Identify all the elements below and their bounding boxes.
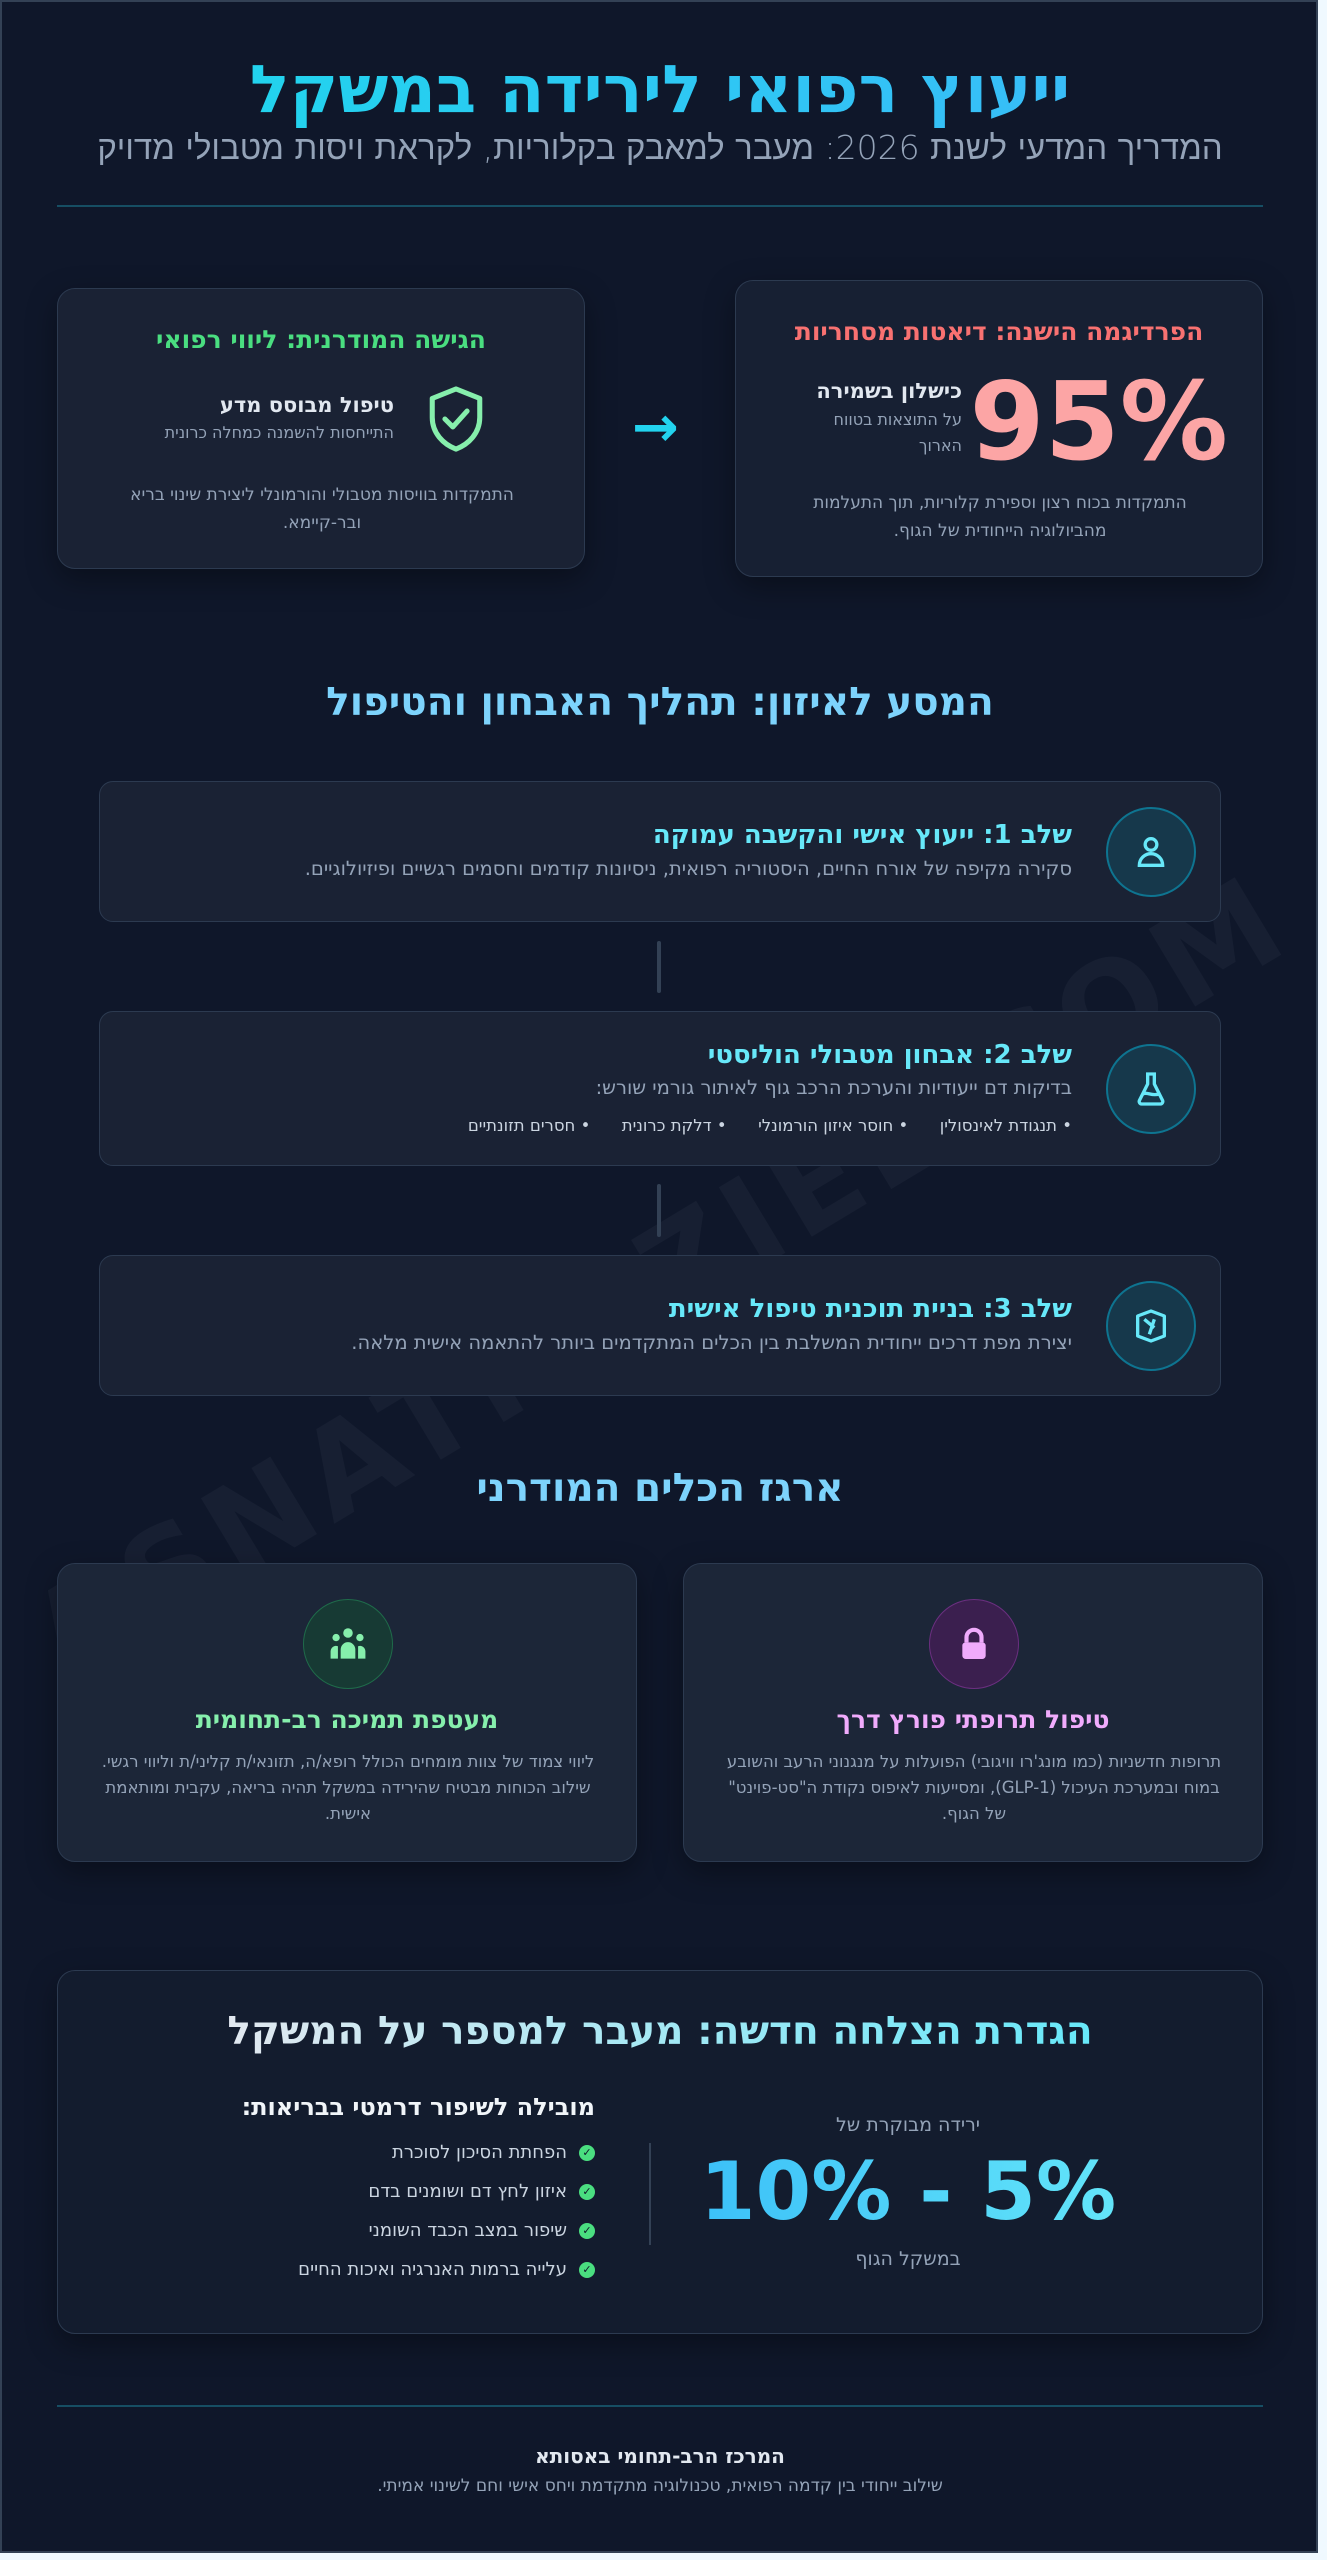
text: support: ליווי צמוד של צוות מומחים הכולל רופא/ה, תזונאי/ת קליני/ת וליווי רגשי. שילוב הכוחות מבטיח שהירידה במשקל תהיה בריאה, עקבית ומותאמת אישית.: [102, 1752, 594, 1823]
heading: toolkit: ארגז הכלים המודרני: [476, 1466, 844, 1511]
step 1: [99, 781, 1221, 922]
list: health benefits: ✓: [582, 2263, 592, 2276]
arrow: →: [632, 395, 679, 460]
step 2: בדיקות דם ייעודיות והערכת הרכב גוף לאיתור גורמי שורש:: [596, 1076, 1072, 1099]
stat: 5-10%: [700, 2114, 1116, 2270]
title: ייעוץ רפואי לירידה במשקל: [250, 51, 1070, 128]
heading: modern approach: הגישה המודרנית: ליווי רפואי: [156, 325, 486, 354]
icon: person: [1106, 807, 1196, 897]
text: modern description: התמקדות בוויסות מטבולי והורמונלי ליצירת שינוי בריא ובר-קיימא.: [130, 485, 514, 533]
panel: old paradigm: [735, 280, 1263, 577]
icon: lock: [929, 1599, 1019, 1689]
step 3: יצירת מפת דרכים ייחודית המשלבת בין הכלים המתקדמים ביותר להתאמה אישית מלאה.: [351, 1331, 1072, 1354]
icon: map: [1106, 1281, 1196, 1371]
text: failure: על התוצאות בטווח הארוך: [834, 410, 962, 455]
list: health benefits: הפחתת הסיכון לסוכרת: [392, 2142, 567, 2163]
stat: 5-10%: במשקל הגוף: [855, 2248, 961, 2270]
footer: המרכז הרב-תחומי באסותא: [535, 2444, 785, 2468]
icon: shield: [430, 386, 482, 452]
step 1: שלב 1: ייעוץ אישי והקשבה עמוקה: [653, 820, 1072, 850]
stat: 95%: 95%: [969, 360, 1228, 485]
list: health benefits: עלייה ברמות האנרגיה ואיכות החיים: [298, 2259, 567, 2280]
list: health benefits: ✓: [582, 2146, 592, 2159]
title: support: מעטפת תמיכה רב-תחומית: [196, 1705, 498, 1734]
list: health benefits: שיפור במצב הכבד השומני: [369, 2220, 567, 2241]
list: health benefits: ✓: [582, 2224, 592, 2237]
panel: success definition: [57, 1970, 1263, 2334]
list: health benefits: מובילה לשיפור דרמטי בבריאות:: [242, 2093, 595, 2121]
text: science based: טיפול מבוסס מדע: [220, 393, 394, 417]
text: failure: כישלון בשמירה: [816, 379, 962, 403]
step 3: [99, 1255, 1221, 1396]
icon: people: [303, 1599, 393, 1689]
step 2: [99, 1011, 1221, 1166]
title: medication: טיפול תרופתי פורץ דרך: [836, 1705, 1110, 1734]
subtitle: המדריך המדעי לשנת 2026: מעבר למאבק בקלוריות, לקראת ויסות מטבולי מדויק: [97, 128, 1223, 167]
panel: support team: [57, 1563, 637, 1862]
heading: journey: המסע לאיזון: תהליך האבחון והטיפול: [326, 680, 994, 725]
text: old description: התמקדות בכוח רצון וספירת קלוריות, תוך התעלמות מהביולוגיה הייחודית של הגוף.: [813, 493, 1187, 541]
footer: שילוב ייחודי בין קדמה רפואית, טכנולוגיה מתקדמת ויחס אישי וחם לשינוי אמיתי.: [377, 2476, 943, 2496]
text: medication: תרופות חדשניות (כמו מונג'רו וויגובי) הפועלות על מנגנוני הרעב והשובע במוח ובמערכת העיכול (GLP-1), ומסייעות לאיפוס נקודת ה"סט-פוינט" של הגוף.: [727, 1752, 1221, 1823]
panel: medication: [683, 1563, 1263, 1862]
list: health benefits: [242, 2093, 595, 2280]
text: science based: [164, 393, 394, 442]
heading: old paradigm: הפרדיגמה הישנה: דיאטות מסחריות: [795, 317, 1203, 346]
stat: 5-10%: 10% - 5%: [700, 2145, 1116, 2238]
step 3: שלב 3: בניית תוכנית טיפול אישית: [669, 1294, 1072, 1324]
stat: 5-10%: ירידה מבוקרת של: [836, 2114, 980, 2136]
icon: flask: [1106, 1044, 1196, 1134]
bullet list: • תנגודת לאינסולין • חוסר איזון הורמונלי • דלקת כרונית • חסרים תזונתיים: [468, 1116, 1072, 1135]
list: health benefits: איזון לחץ דם ושומנים בדם: [368, 2181, 567, 2202]
footer: [377, 2444, 943, 2496]
step 1: סקירה מקיפה של אורח החיים, היסטוריה רפואית, ניסיונות קודמים וחסמים רגשיים ופיזיולוגיים.: [305, 857, 1072, 880]
text: failure: [816, 379, 962, 455]
heading: success: הגדרת הצלחה חדשה: מעבר למספר על המשקל: [227, 2009, 1093, 2054]
step 2: שלב 2: אבחון מטבולי הוליסטי: [708, 1040, 1072, 1070]
panel: modern approach: [57, 288, 585, 569]
list: health benefits: ✓: [582, 2185, 592, 2198]
text: science based: התייחסות להשמנה כמחלה כרונית: [165, 423, 394, 442]
watermark: ASNATRAZIEL.COM: [7, 847, 1313, 1711]
